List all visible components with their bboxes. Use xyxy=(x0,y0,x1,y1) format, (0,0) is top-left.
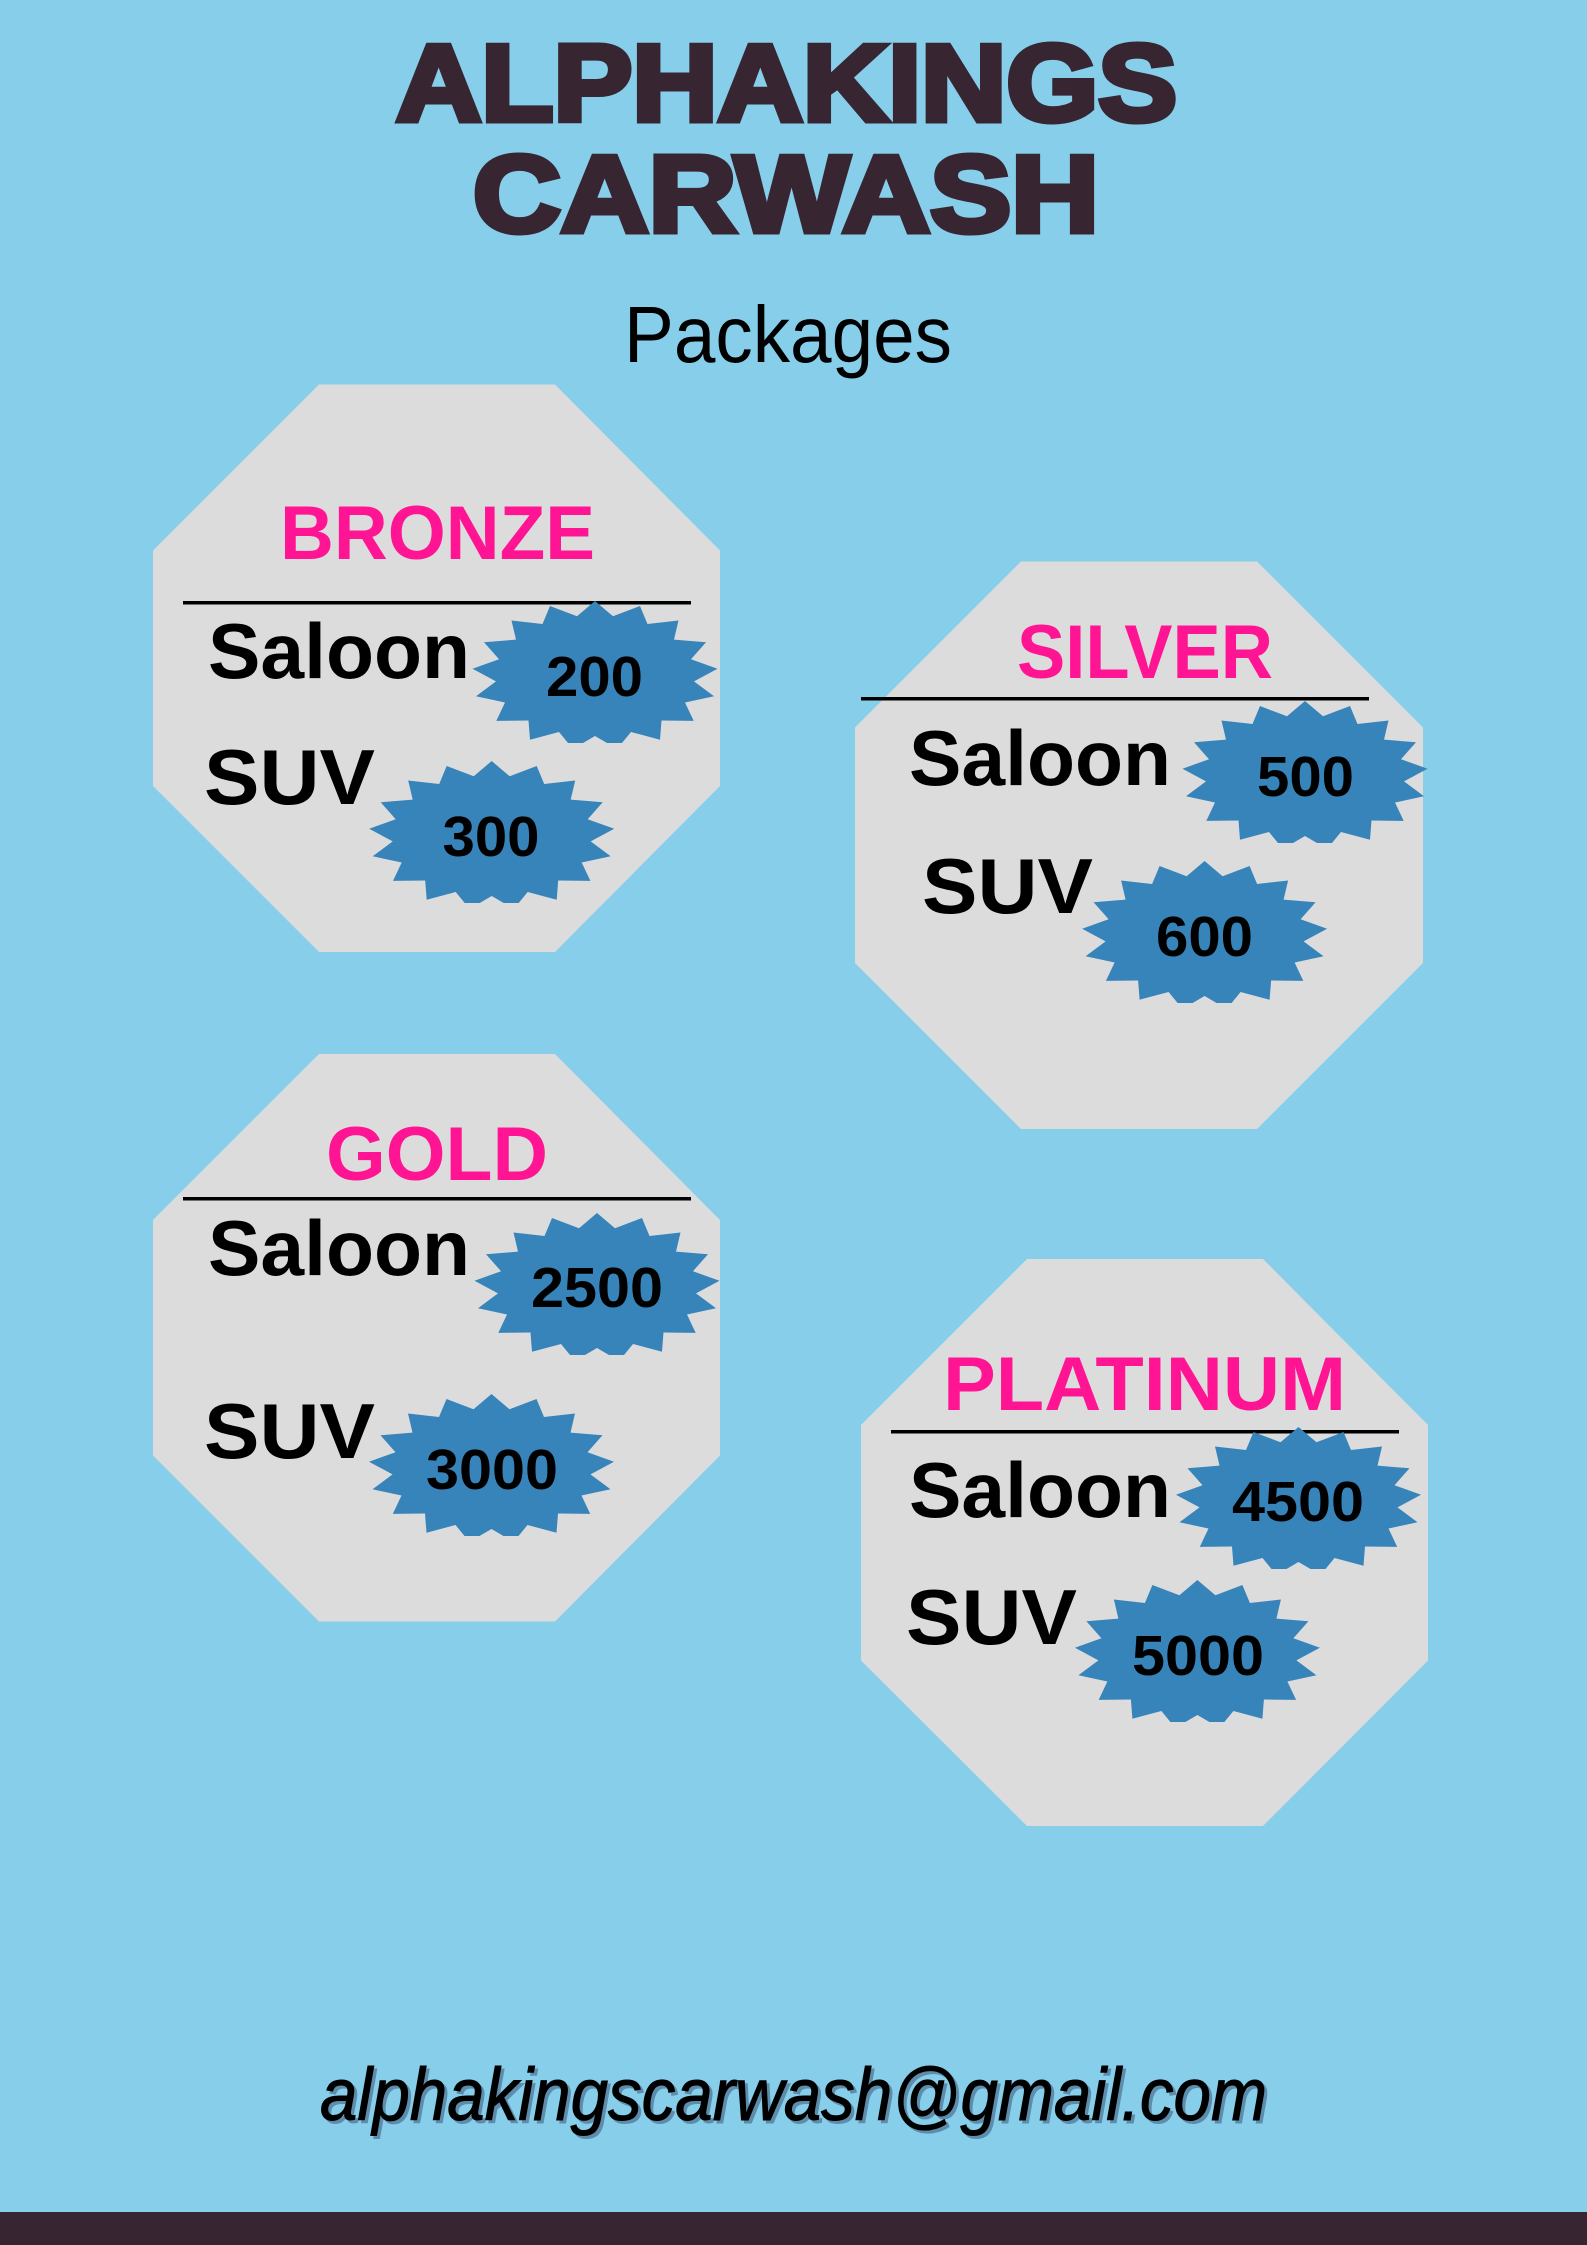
badge: suv price 600 xyxy=(1082,861,1327,1003)
contact email: alphakingscarwash@gmail.com xyxy=(320,2053,1267,2136)
label: saloon: Saloon xyxy=(208,607,470,695)
title: ALPHAKINGS xyxy=(396,22,1177,144)
octagon: bronze xyxy=(153,384,720,952)
label: saloon: Saloon xyxy=(208,1204,470,1292)
subtitle: Packages: Packages xyxy=(624,290,952,379)
label: suv: SUV xyxy=(922,842,1093,930)
badge: saloon price 4500 xyxy=(1176,1427,1421,1569)
divider: silver xyxy=(861,697,1369,700)
panel: platinum xyxy=(861,1259,1428,1826)
badge: saloon price 200 xyxy=(472,601,718,743)
label: suv: SUV xyxy=(906,1573,1077,1661)
badge: suv price 5000 xyxy=(1075,1580,1320,1722)
badge: saloon price 200: 200 xyxy=(546,645,643,709)
label: saloon: Saloon xyxy=(909,1446,1171,1534)
divider: platinum xyxy=(891,1430,1399,1434)
badge: saloon price 500 xyxy=(1182,701,1428,843)
panel: bronze xyxy=(153,384,720,952)
octagon: platinum xyxy=(861,1259,1428,1826)
heading: gold: GOLD xyxy=(326,1112,548,1197)
title: CARWASH xyxy=(473,134,1099,256)
label: suv: SUV xyxy=(204,1387,375,1475)
octagon: gold xyxy=(153,1054,720,1622)
badge: saloon price 500: 500 xyxy=(1257,745,1354,809)
label: suv: SUV xyxy=(204,733,375,821)
badge: saloon price 2500 xyxy=(474,1213,720,1355)
panel: silver xyxy=(855,562,1428,1129)
divider: gold xyxy=(183,1197,691,1200)
footer bar xyxy=(0,2212,1587,2245)
badge: suv price 3000 xyxy=(369,1394,614,1536)
title xyxy=(396,22,1177,256)
badge: saloon price 4500: 4500 xyxy=(1232,1470,1364,1534)
label: saloon: Saloon xyxy=(909,714,1171,802)
badge: suv price 5000: 5000 xyxy=(1132,1624,1264,1688)
badge: saloon price 2500: 2500 xyxy=(531,1256,663,1320)
divider: bronze xyxy=(183,601,691,604)
badge: suv price 600: 600 xyxy=(1156,905,1253,969)
octagon: silver xyxy=(855,562,1423,1129)
heading: bronze: BRONZE xyxy=(280,491,595,576)
badge: suv price 300 xyxy=(369,761,614,903)
badge: suv price 3000: 3000 xyxy=(426,1438,558,1502)
heading: platinum: PLATINUM xyxy=(943,1342,1346,1427)
heading: silver: SILVER xyxy=(1017,610,1273,695)
panel: gold xyxy=(153,1054,720,1622)
badge: suv price 300: 300 xyxy=(442,805,540,869)
